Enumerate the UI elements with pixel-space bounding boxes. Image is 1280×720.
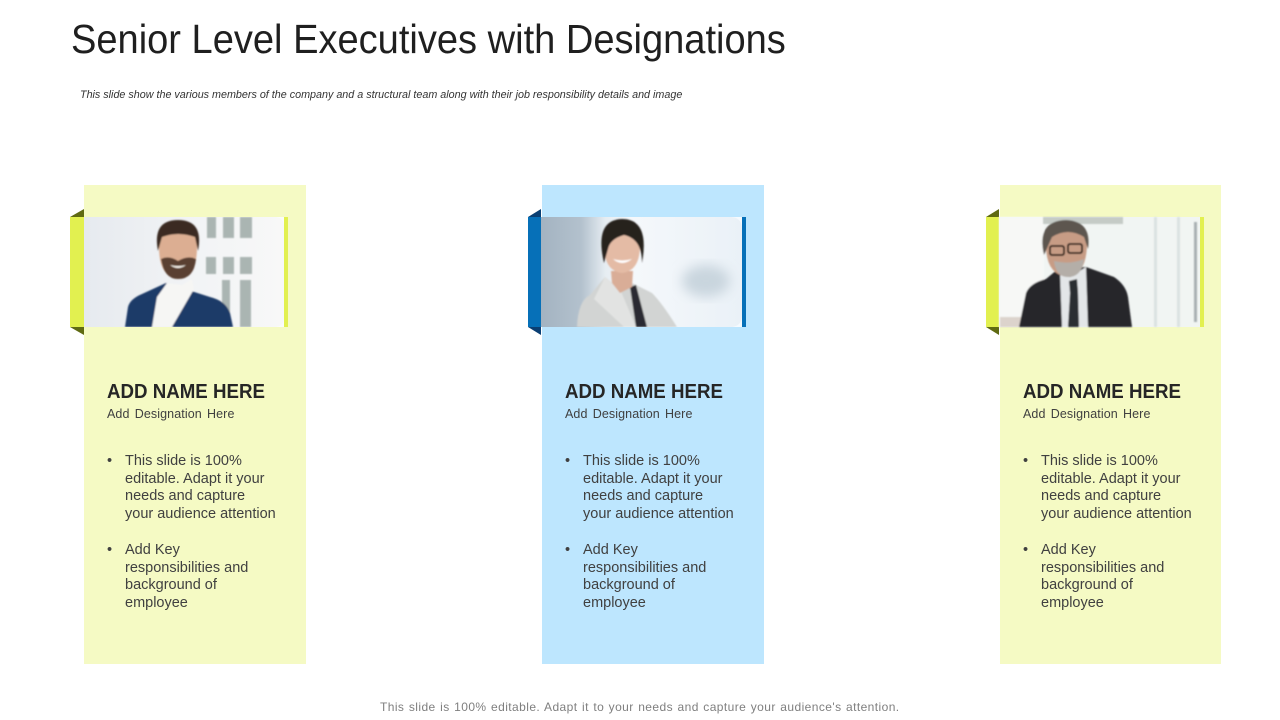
bullet list: Add Key bbox=[1041, 542, 1096, 558]
name: ADD NAME HERE bbox=[565, 381, 723, 403]
bullet list: • bbox=[1023, 453, 1028, 469]
bullet list: employee bbox=[125, 595, 188, 611]
bullet list bbox=[565, 453, 734, 611]
bullet list: your audience attention bbox=[125, 506, 276, 522]
bullet list: needs and capture bbox=[1041, 488, 1161, 504]
subtitle: This slide show the various members of the company and a structural team along with their job responsibility details and image bbox=[80, 89, 682, 101]
photo band: executive 3 bbox=[986, 209, 1204, 335]
bullet list: This slide is 100% bbox=[125, 453, 242, 469]
bullet list: Add Key bbox=[125, 542, 180, 558]
bullet list: responsibilities and bbox=[125, 560, 248, 576]
photo band: executive 1 bbox=[70, 209, 288, 335]
name: ADD NAME HERE bbox=[1023, 381, 1181, 403]
photo band: executive 2 bbox=[528, 209, 746, 335]
bullet list: This slide is 100% bbox=[583, 453, 700, 469]
bullet list: Add Key bbox=[583, 542, 638, 558]
footer note: This slide is 100% editable. Adapt it to your needs and capture your audience's attention. bbox=[380, 700, 900, 714]
panel: executive 1 bbox=[84, 185, 306, 664]
bullet list bbox=[1023, 453, 1192, 611]
designation: Add Designation Here bbox=[107, 407, 234, 421]
bullet list: background of bbox=[583, 577, 675, 593]
name: ADD NAME HERE bbox=[107, 381, 265, 403]
bullet list: your audience attention bbox=[583, 506, 734, 522]
bullet list bbox=[107, 453, 276, 611]
bullet list: employee bbox=[583, 595, 646, 611]
bullet list: employee bbox=[1041, 595, 1104, 611]
bullet list: This slide is 100% bbox=[1041, 453, 1158, 469]
bullet list: responsibilities and bbox=[583, 560, 706, 576]
bullet list: • bbox=[565, 453, 570, 469]
bullet list: • bbox=[565, 542, 570, 558]
bullet list: editable. Adapt it your bbox=[125, 471, 264, 487]
bullet list: • bbox=[1023, 542, 1028, 558]
panel: executive 2 bbox=[542, 185, 764, 664]
bullet list: responsibilities and bbox=[1041, 560, 1164, 576]
designation: Add Designation Here bbox=[1023, 407, 1150, 421]
bullet list: your audience attention bbox=[1041, 506, 1192, 522]
bullet list: editable. Adapt it your bbox=[583, 471, 722, 487]
designation: Add Designation Here bbox=[565, 407, 692, 421]
bullet list: needs and capture bbox=[583, 488, 703, 504]
bullet list: • bbox=[107, 453, 112, 469]
bullet list: editable. Adapt it your bbox=[1041, 471, 1180, 487]
bullet list: • bbox=[107, 542, 112, 558]
bullet list: background of bbox=[1041, 577, 1133, 593]
panel: executive 3 bbox=[1000, 185, 1221, 664]
bullet list: needs and capture bbox=[125, 488, 245, 504]
bullet list: background of bbox=[125, 577, 217, 593]
title: Senior Level Executives with Designations bbox=[71, 16, 786, 62]
